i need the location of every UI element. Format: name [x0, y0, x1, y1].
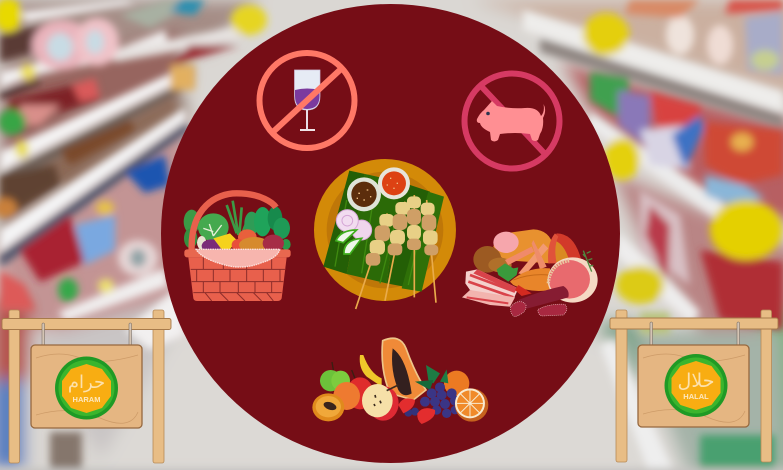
illustration: vegetable basket — [184, 193, 291, 301]
sign: halal — [610, 310, 778, 462]
illustration: satay plate — [314, 159, 456, 309]
badge: haram — [55, 356, 118, 420]
left shelves — [22, 0, 135, 22]
maroon central circle — [161, 4, 620, 463]
badge: halal — [664, 354, 728, 417]
lime wedges — [336, 230, 357, 243]
yellow tags left — [0, 0, 22, 32]
icon: no wine — [260, 53, 354, 148]
badge: haram: HARAM — [73, 395, 100, 404]
illustration: processed meats — [462, 229, 598, 317]
badge: halal: حلال — [678, 370, 714, 392]
banana leaves — [323, 171, 444, 292]
illustration: fresh fruits — [312, 338, 488, 424]
yellow tags right — [583, 13, 629, 55]
right shelves — [523, 10, 783, 112]
left shelf shadows — [0, 78, 40, 100]
skewers — [356, 195, 436, 309]
sign: haram — [2, 310, 171, 463]
icon: no pork — [464, 74, 560, 168]
badge: haram: حرام — [68, 372, 105, 393]
badge: halal: HALAL — [683, 392, 709, 401]
left products — [32, 20, 92, 70]
right products — [590, 72, 632, 125]
onion slices — [352, 220, 372, 240]
sauce bowls — [347, 177, 381, 211]
